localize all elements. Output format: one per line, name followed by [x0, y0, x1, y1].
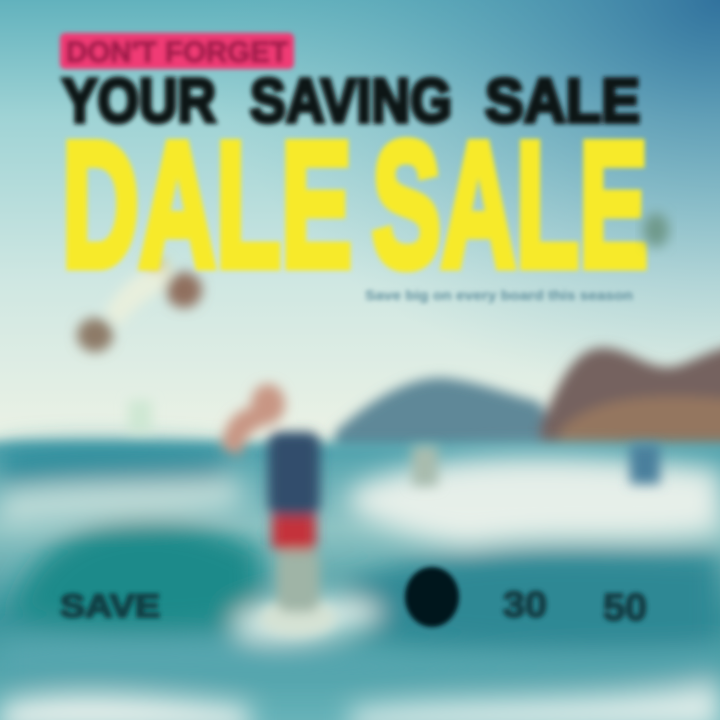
- heading: black line: YOUR: [62, 67, 216, 136]
- bottom labels: [60, 584, 647, 629]
- distant mountains: [335, 345, 720, 452]
- kicker: pink label: DON'T FORGET: [66, 36, 288, 69]
- subtitle: Save big on every board this season: [365, 287, 633, 303]
- main title: yellow: DALE: [62, 105, 352, 304]
- bottom labels: 50: [603, 587, 647, 629]
- sea and waves: [0, 442, 720, 720]
- bottom labels: SAVE: [60, 588, 160, 624]
- heading: black line: [62, 67, 640, 136]
- heading: black line: SAVING: [250, 67, 452, 136]
- small grey dot beside title: [643, 213, 669, 247]
- sky background: [0, 0, 720, 470]
- small distant figures: [128, 400, 660, 486]
- heading: black line: SALE: [485, 67, 640, 136]
- surfer: [222, 384, 336, 636]
- icon: black circle badge: [405, 567, 459, 627]
- bottom labels: 30: [503, 584, 547, 625]
- kite: [77, 259, 202, 352]
